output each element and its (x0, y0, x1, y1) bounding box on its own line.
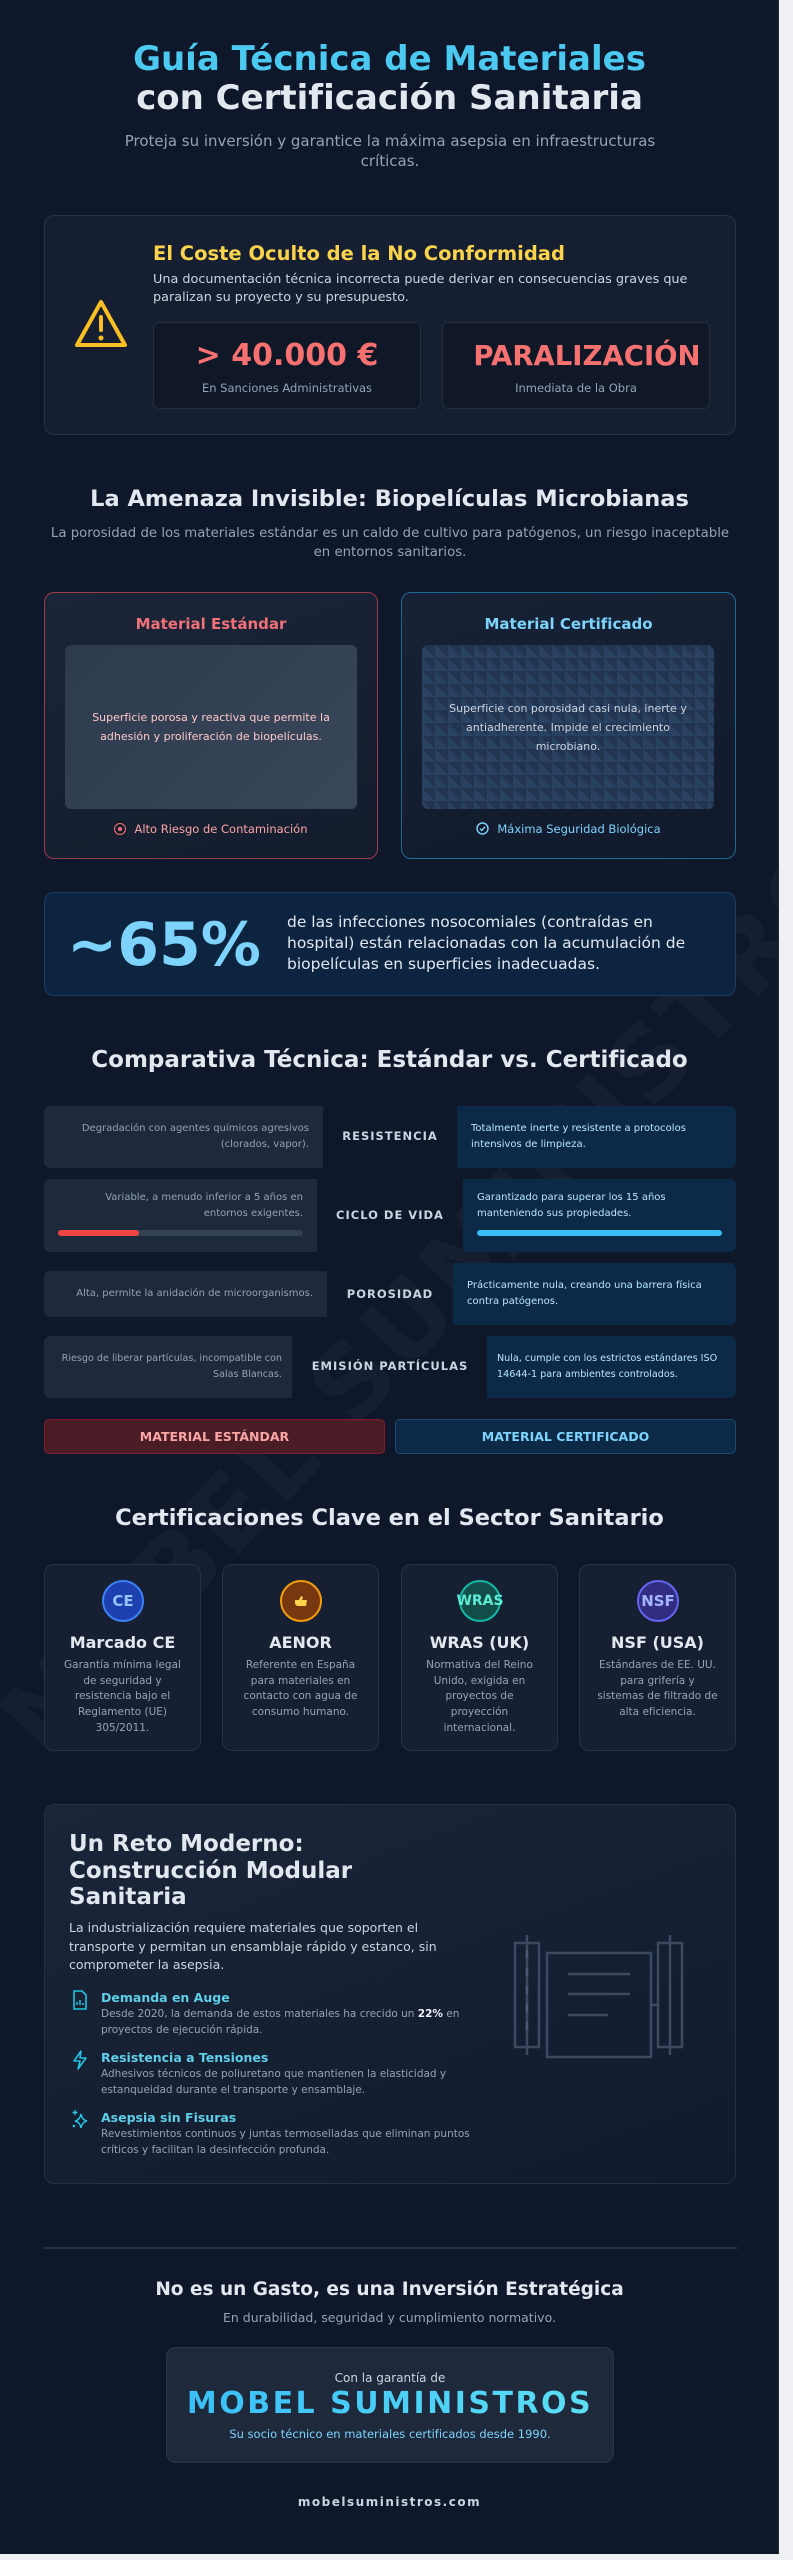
panel: material estandar: Material Estándar (136, 615, 286, 633)
surface: certified pattern: Superficie con porosidad casi nula, inerte y antiadherente. Impide el crecimiento microbiano. (449, 702, 687, 752)
item: asepsia (101, 2110, 470, 2156)
heading: comparativa: Comparativa Técnica: Estándar vs. Certificado (91, 1047, 688, 1073)
icon: bolt (73, 2050, 87, 2070)
item: demanda (101, 1990, 459, 2036)
card: CE: Marcado CE (70, 1633, 175, 1652)
title: con Certificación Sanitaria (136, 78, 643, 118)
stat: paralizacion: PARALIZACIÓN (473, 340, 701, 372)
comparison: ciclo de vida (44, 1179, 736, 1252)
item: asepsia: Asepsia sin Fisuras (101, 2110, 236, 2125)
comparison: porosidad: Alta, permite la anidación de microorganismos. (76, 1288, 313, 1299)
icon: sparkles (72, 2110, 88, 2128)
subtitle: biopeliculas: La porosidad de los materiales estándar es un caldo de cultivo para patógenos, un riesgo inaceptable en entornos sanitarios. (51, 526, 729, 560)
panel: construccion modular (44, 1804, 736, 2184)
card: NSF: Estándares de EE. UU. para grifería y sistemas de filtrado de alta eficiencia. (597, 1659, 718, 1718)
card: WRAS: Normativa del Reino Unido, exigida en proyectos de proyección internacional. (426, 1659, 533, 1734)
subtitle: inversion: En durabilidad, seguridad y cumplimiento normativo. (223, 2310, 556, 2325)
panel: material certificado: Material Certificado (484, 615, 653, 633)
comparison: porosidad: Prácticamente nula, creando una barrera física contra patógenos. (467, 1280, 702, 1307)
comparison: ciclo de vida: Garantizado para superar los 15 años manteniendo sus propiedades. (477, 1192, 666, 1218)
panel: material estandar (44, 592, 378, 859)
card: AENOR: AENOR (269, 1633, 332, 1652)
comparison: porosidad (44, 1263, 736, 1325)
comparison: emision particulas: EMISIÓN PARTÍCULAS (312, 1359, 468, 1373)
subtitle: Proteja su inversión y garantice la máxima asepsia en infraestructuras críticas. (125, 132, 655, 170)
item: asepsia: Revestimientos continuos y juntas termoselladas que eliminan puntos críticos y facilitan la desinfección profunda. (101, 2128, 470, 2156)
card: AENOR (222, 1564, 379, 1751)
heading: coste oculto: El Coste Oculto de la No Conformidad (153, 242, 565, 265)
brand box: MOBEL SUMINISTROS (187, 2386, 593, 2421)
item: resistencia: Adhesivos técnicos de poliuretano que mantienen la elasticidad y estanqueidad durante el transporte y ensamblaje. (101, 2068, 446, 2096)
comparison: emision particulas (44, 1336, 736, 1398)
card: AENOR: Referente en España para materiales en contacto con agua de consumo humano. (244, 1659, 357, 1718)
stat: 65%: ~65% (67, 910, 261, 980)
card: CE: Garantía mínima legal de seguridad y resistencia bajo el Reglamento (UE) 305/2011. (64, 1659, 181, 1734)
surface: porous: Superficie porosa y reactiva que permite la adhesión y proliferación de biopelículas. (92, 711, 330, 743)
brand box: Con la garantía de (335, 2371, 445, 2385)
comparison: resistencia: Totalmente inerte y resistente a protocolos intensivos de limpieza. (471, 1123, 686, 1150)
legend (44, 1419, 736, 1454)
card: WRAS: WRAS (456, 1593, 504, 1609)
item: demanda: Desde 2020, la demanda de estos materiales ha crecido un 22% en proyectos de ejecución rápida. (101, 2008, 459, 2036)
stat: sanciones (153, 322, 421, 409)
card: CE: CE (112, 1592, 134, 1610)
card: NSF (579, 1564, 736, 1751)
comparison: resistencia (44, 1106, 736, 1168)
title: Guía Técnica de Materiales (133, 39, 646, 79)
card: NSF: NSF (641, 1592, 675, 1610)
card: NSF: NSF (USA) (611, 1633, 704, 1652)
icon: document (73, 1990, 87, 2010)
stat: 65% (44, 892, 736, 996)
title (133, 39, 646, 118)
text: reto: La industrialización requiere materiales que soporten el transporte y permitan un ensamblaje rápido y estanco, sin comprometer la asepsia. (69, 1920, 437, 1972)
heading: certificaciones: Certificaciones Clave en el Sector Sanitario (115, 1505, 664, 1531)
text: coste description: Una documentación técnica incorrecta puede derivar en consecuencias graves que paralizan su proyecto y su presupuesto. (153, 272, 687, 305)
stat: paralizacion (442, 322, 710, 409)
heading: reto moderno: Un Reto Moderno: Construcción Modular Sanitaria (69, 1831, 352, 1910)
legend: MATERIAL ESTÁNDAR (140, 1429, 289, 1444)
comparison: resistencia: RESISTENCIA (342, 1129, 438, 1143)
heading: biopeliculas: La Amenaza Invisible: Biopelículas Microbianas (90, 486, 689, 512)
stat: sanciones: > 40.000 € (196, 338, 378, 373)
surface: certified pattern (422, 645, 714, 809)
icon: warning (75, 300, 128, 347)
comparison: emision particulas: Riesgo de liberar partículas, incompatible con Salas Blancas. (62, 1353, 282, 1380)
surface: porous (65, 645, 357, 809)
heading: inversion: No es un Gasto, es una Inversión Estratégica (155, 2279, 624, 2300)
legend: MATERIAL CERTIFICADO (482, 1429, 649, 1444)
stat: 65%: de las infecciones nosocomiales (contraídas en hospital) están relacionadas con la acumulación de biopelículas en superficies inadecuadas. (287, 913, 685, 973)
comparison: ciclo de vida: CICLO DE VIDA (336, 1208, 444, 1222)
card: WRAS: WRAS (UK) (430, 1633, 529, 1652)
comparison: resistencia: Degradación con agentes químicos agresivos (clorados, vapor). (82, 1123, 309, 1150)
comparison: emision particulas: Nula, cumple con los estrictos estándares ISO 14644-1 para ambientes controlados. (497, 1353, 717, 1380)
illustration: modular panel (514, 1935, 684, 2058)
comparison: ciclo de vida: Variable, a menudo inferior a 5 años en entornos exigentes. (105, 1192, 303, 1218)
stat: sanciones: En Sanciones Administrativas (202, 381, 372, 395)
panel: coste oculto (44, 215, 736, 435)
brand box (166, 2347, 614, 2463)
card: WRAS (401, 1564, 558, 1751)
comparison: porosidad: POROSIDAD (347, 1287, 433, 1301)
footer: seguridad: Máxima Seguridad Biológica (497, 822, 661, 836)
divider (44, 2247, 737, 2249)
item: resistencia: Resistencia a Tensiones (101, 2050, 268, 2065)
brand box: Su socio técnico en materiales certificados desde 1990. (229, 2427, 551, 2441)
item: demanda: Demanda en Auge (101, 1990, 230, 2005)
stat: paralizacion: Inmediata de la Obra (515, 381, 637, 395)
card: CE (44, 1564, 201, 1751)
item: resistencia (101, 2050, 446, 2096)
footer url: mobelsuministros.com (298, 2495, 481, 2509)
panel: material certificado (401, 592, 736, 859)
footer: riesgo: Alto Riesgo de Contaminación (134, 822, 308, 836)
